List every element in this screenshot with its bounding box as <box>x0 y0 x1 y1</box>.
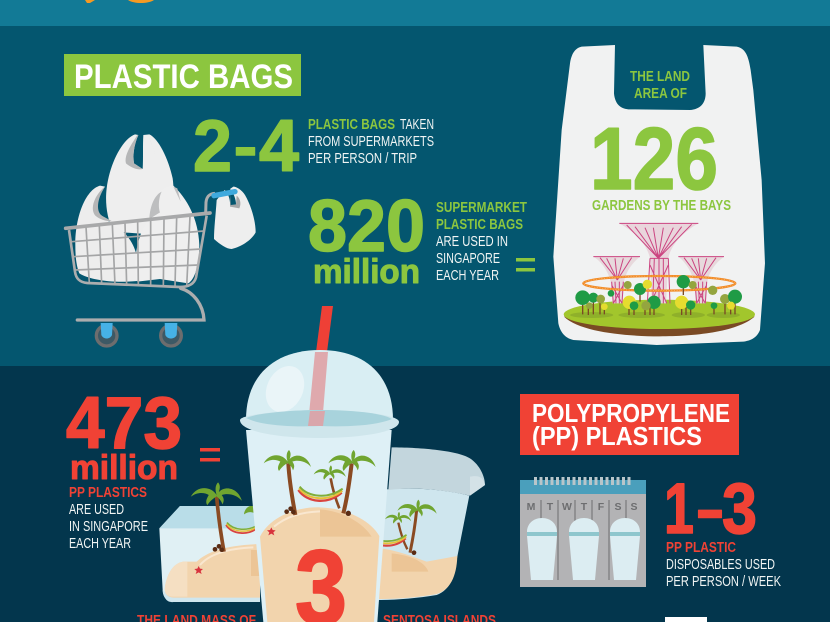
background: polypropylene section <box>0 366 830 622</box>
stat: 1-3 PP plastic disposables per week: 3 <box>722 470 757 549</box>
weekday letters: M <box>527 501 536 513</box>
weekday letters: W <box>562 501 572 513</box>
large cup with island <box>246 430 392 622</box>
stat: 820 million supermarket plastic bags: SUPERMARKET <box>436 200 527 216</box>
cropped orange title fragments <box>85 0 154 3</box>
weekday letters <box>527 501 638 513</box>
island <box>564 317 755 336</box>
stat: 820 million supermarket plastic bags: ARE USED IN <box>436 234 508 250</box>
stat: 2-4 plastic bags per trip <box>193 106 434 187</box>
left supertree <box>593 257 640 303</box>
three cups <box>527 518 640 580</box>
land area label: AREA OF <box>634 86 687 102</box>
stat: 1-3 PP plastic disposables per week: DISPOSABLES USED <box>666 557 775 573</box>
stat: 2-4 plastic bags per trip: PLASTIC BAGS <box>308 117 395 133</box>
heading: polypropylene plastics: (PP) PLASTICS <box>532 421 702 451</box>
stat: 2-4 plastic bags per trip: – <box>235 106 256 187</box>
heading: polypropylene plastics <box>520 394 739 455</box>
weekday letters: S <box>614 501 622 513</box>
stat: 473 million PP plastics: 473 <box>66 383 182 464</box>
plastic tub with island <box>367 447 485 600</box>
stat: 473 million PP plastics: million <box>70 449 178 487</box>
cart handle <box>214 192 235 196</box>
cart rim and basket outline <box>66 213 210 228</box>
cropped white box at bottom edge <box>665 617 707 622</box>
background: plastic bags section <box>0 26 830 366</box>
stat: 473 million PP plastics <box>66 383 182 552</box>
hanging bag <box>214 187 256 249</box>
right bag <box>135 186 199 283</box>
dome lid <box>246 350 393 420</box>
stat: 1-3 PP plastic disposables per week: PER PERSON / WEEK <box>666 574 781 590</box>
illustration: dome lid and straw of large cup <box>240 306 399 438</box>
stat: 2-4 plastic bags per trip: FROM SUPERMARKETS <box>308 134 434 150</box>
garden trees <box>570 275 742 318</box>
stat: 1-3 PP plastic disposables per week: 1 <box>664 470 694 549</box>
icon: shopping cart full of plastic bags <box>66 134 256 346</box>
stat: 820 million supermarket plastic bags <box>308 186 527 291</box>
weekday letters: T <box>547 501 554 513</box>
central supertree <box>619 223 698 303</box>
big bag <box>106 134 174 235</box>
heading: plastic bags: PLASTIC BAGS <box>74 58 293 96</box>
wheels <box>96 323 181 346</box>
right supertree <box>678 257 724 303</box>
number 126: 126 <box>590 109 718 208</box>
icon: weekly calendar with three cups <box>520 480 646 587</box>
stat: 1-3 PP plastic disposables per week <box>664 470 781 590</box>
stat: 473 million PP plastics: ARE USED <box>69 502 124 518</box>
equals sign <box>200 448 220 462</box>
weekday letters: T <box>581 501 588 513</box>
stat: 473 million PP plastics: EACH YEAR <box>69 536 131 552</box>
stat: 473 million PP plastics: IN SINGAPORE <box>69 519 148 535</box>
plastic box with island <box>159 482 260 602</box>
supertrees and island <box>564 223 755 336</box>
stat: 1-3 PP plastic disposables per week: – <box>697 470 723 549</box>
cart grid <box>72 216 204 287</box>
weekday letters: S <box>630 501 638 513</box>
left bag <box>75 186 138 282</box>
equals sign <box>516 258 535 272</box>
stat: 820 million supermarket plastic bags: 820 <box>308 186 425 267</box>
stat: 1-3 PP plastic disposables per week: PP PLASTIC <box>666 540 736 556</box>
red straw above dome <box>316 306 333 352</box>
lid rim <box>240 410 399 438</box>
illustration: islands in plastic containers <box>159 430 485 622</box>
stat: 473 million PP plastics: PP PLASTICS <box>69 485 147 501</box>
stat: 820 million supermarket plastic bags: EACH YEAR <box>436 268 499 284</box>
land area label <box>630 69 690 102</box>
stat: 2-4 plastic bags per trip: 4 <box>259 106 299 187</box>
stat: 820 million supermarket plastic bags: million <box>313 253 420 291</box>
stat: 2-4 plastic bags per trip: PER PERSON / TRIP <box>308 151 417 167</box>
heading: polypropylene plastics: POLYPROPYLENE <box>532 398 730 428</box>
orange walkway ring <box>583 276 735 291</box>
stat: 820 million supermarket plastic bags: SINGAPORE <box>436 251 500 267</box>
stat: 820 million supermarket plastic bags: PLASTIC BAGS <box>436 217 523 233</box>
cart frame <box>77 288 204 320</box>
gardens by the bays label: GARDENS BY THE BAYS <box>592 198 731 214</box>
stat: 2-4 plastic bags per trip: TAKEN <box>400 117 434 133</box>
illustration: large plastic bag with gardens by the bay <box>553 45 765 345</box>
weekday letters: F <box>598 501 605 513</box>
background: top teal band <box>0 0 830 26</box>
land area label: THE LAND <box>630 69 690 85</box>
pale straw inside dome <box>308 352 328 425</box>
calendar spiral binding <box>534 477 633 485</box>
stat: 2-4 plastic bags per trip: 2 <box>193 106 232 187</box>
